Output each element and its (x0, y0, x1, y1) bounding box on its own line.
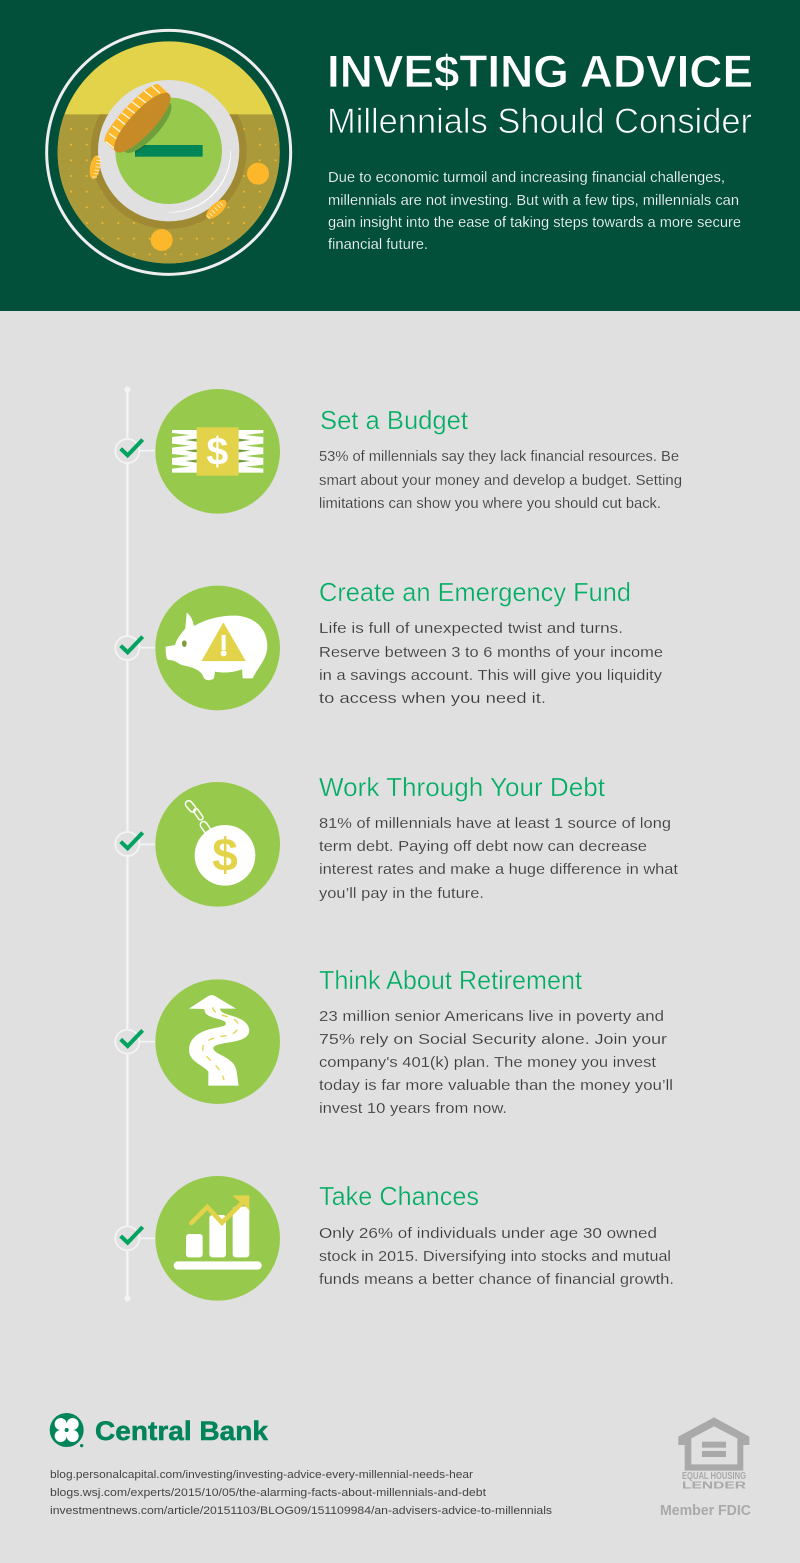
icon: money stack (155, 389, 280, 514)
body text (319, 1225, 674, 1288)
icon: money stack: $ (206, 430, 228, 474)
icon: rising bar chart (155, 1176, 280, 1301)
body text: in a savings account. This will give you liquidity (319, 667, 663, 684)
title: INVE$TING ADVICE (327, 46, 753, 97)
logo: Central Bank: Central Bank (95, 1416, 269, 1446)
body text: funds means a better chance of financial growth. (319, 1271, 674, 1288)
body text: invest 10 years from now. (319, 1100, 507, 1117)
panel: header (0, 0, 800, 311)
body text: interest rates and make a huge difference in what (319, 861, 679, 878)
heading: Think About Retirement (319, 965, 583, 995)
source list: blogs.wsj.com/experts/2015/10/05/the-alarming-facts-about-millennials-and-debt (50, 1487, 486, 1499)
check marker (115, 832, 155, 856)
body text: Reserve between 3 to 6 months of your income (319, 644, 663, 661)
source list: investmentnews.com/article/20151103/BLOG09/151109984/an-advisers-advice-to-millennials (50, 1505, 553, 1517)
body text (319, 815, 679, 902)
source list: blog.personalcapital.com/investing/investing-advice-every-millennial-needs-hear (50, 1469, 473, 1481)
icon: ball and chain (155, 782, 280, 907)
body text: Only 26% of individuals under age 30 owned (319, 1225, 657, 1242)
icon: winding road (155, 979, 280, 1104)
intro paragraph: financial future. (328, 236, 428, 253)
member FDIC: Member FDIC (660, 1503, 752, 1519)
panel: take chances (115, 1176, 674, 1301)
body text: 75% rely on Social Security alone. Join your (319, 1031, 667, 1048)
check marker (115, 1030, 155, 1054)
body text: 23 million senior Americans live in poverty and (319, 1008, 664, 1025)
body text (319, 448, 682, 512)
body text: Life is full of unexpected twist and turns. (319, 620, 623, 637)
body text: stock in 2015. Diversifying into stocks and mutual (319, 1248, 671, 1265)
panel: set a budget (115, 389, 682, 514)
body text: 53% of millennials say they lack financial resources. Be (319, 448, 679, 465)
check marker (115, 439, 155, 463)
panel: emergency fund (115, 577, 663, 710)
icon: coin in piggy bank slot (47, 30, 291, 274)
body text (319, 1008, 673, 1117)
body text: smart about your money and develop a budget. Setting (319, 472, 682, 489)
equal housing lender logo (678, 1417, 749, 1491)
intro paragraph (328, 169, 741, 253)
check marker (115, 1226, 155, 1250)
body text: today is far more valuable than the money you’ll (319, 1077, 673, 1094)
heading: Work Through Your Debt (319, 772, 606, 802)
check marker (115, 636, 155, 660)
source list (50, 1469, 553, 1517)
logo: Central Bank (50, 1413, 269, 1447)
timeline line (124, 386, 130, 1302)
equal housing lender logo: EQUAL HOUSING (682, 1471, 746, 1482)
body text: to access when you need it. (319, 690, 546, 707)
body text: company's 401(k) plan. The money you invest (319, 1054, 657, 1071)
body text: term debt. Paying off debt now can decrease (319, 838, 647, 855)
icon: ball and chain: $ (212, 828, 238, 880)
body text: 81% of millennials have at least 1 source of long (319, 815, 671, 832)
intro paragraph: millennials are not investing. But with a few tips, millennials can (328, 192, 739, 209)
panel: think about retirement (115, 965, 673, 1117)
intro paragraph: gain insight into the ease of taking steps towards a more secure (328, 214, 741, 231)
icon: piggy bank with warning (155, 586, 280, 710)
panel: work through debt (115, 772, 679, 907)
heading: Create an Emergency Fund (319, 577, 631, 607)
body text: limitations can show you where you should cut back. (319, 495, 661, 512)
intro paragraph: Due to economic turmoil and increasing financial challenges, (328, 169, 725, 186)
body text: you’ll pay in the future. (319, 885, 484, 902)
heading: Take Chances (319, 1181, 479, 1211)
equal housing lender logo: LENDER (682, 1480, 746, 1491)
heading: Set a Budget (320, 405, 469, 435)
body text (319, 620, 663, 707)
subtitle: Millennials Should Consider (327, 102, 752, 141)
